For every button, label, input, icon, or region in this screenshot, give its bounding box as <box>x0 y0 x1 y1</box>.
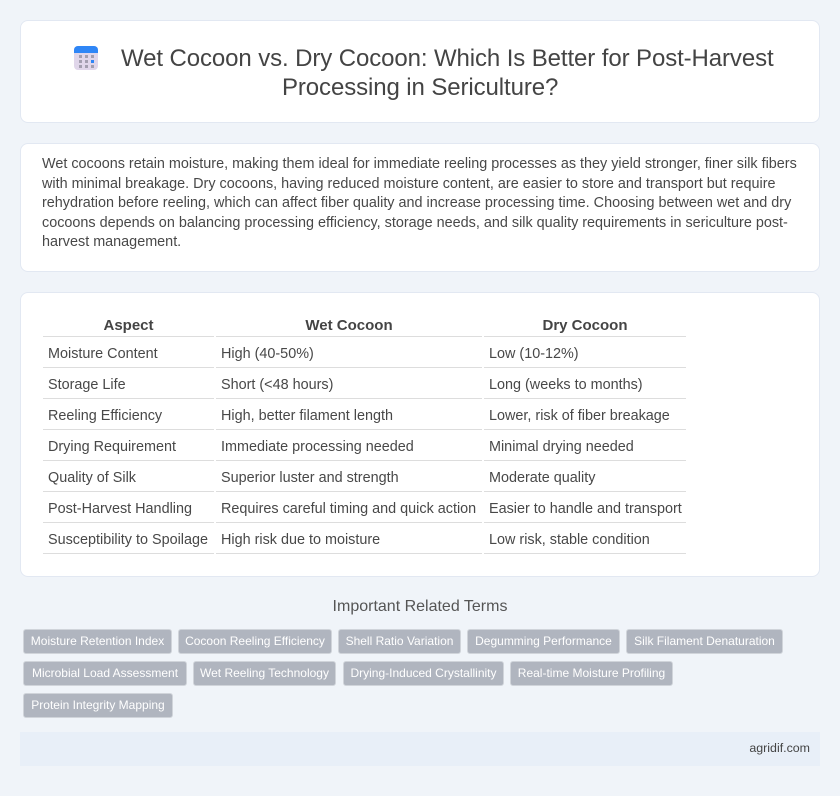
related terms tags: Moisture Retention Index <box>31 634 164 648</box>
header panel: Processing in Sericulture? <box>282 74 558 101</box>
related terms tags: Protein Integrity Mapping <box>31 698 165 712</box>
related terms tags: Microbial Load Assessment <box>32 666 178 680</box>
comparison table: Lower, risk of fiber breakage <box>489 408 670 424</box>
related terms tags: Degumming Performance <box>475 634 612 648</box>
related terms tags: Cocoon Reeling Efficiency <box>185 634 325 648</box>
comparison table: High, better filament length <box>221 408 393 424</box>
intro paragraph: Wet cocoons retain moisture, making them ideal for immediate reeling processes as they yield stronger, finer silk fibers <box>42 156 797 172</box>
comparison table: Low risk, stable condition <box>489 532 650 548</box>
heading: related terms: Important Related Terms <box>333 598 507 615</box>
comparison table: Reeling Efficiency <box>48 408 162 424</box>
comparison table: Dry Cocoon <box>542 317 628 334</box>
title <box>121 45 774 101</box>
related terms tags: Silk Filament Denaturation <box>634 634 775 648</box>
footer bar <box>20 732 820 766</box>
comparison table: Short (<48 hours) <box>221 376 333 392</box>
comparison table: Quality of Silk <box>48 470 136 486</box>
comparison table: Wet Cocoon <box>305 317 393 334</box>
related terms tags: Wet Reeling Technology <box>200 666 329 680</box>
comparison table: High (40-50%) <box>221 346 314 362</box>
footer source: agridif.com <box>749 741 810 755</box>
header panel: Wet Cocoon vs. Dry Cocoon: Which Is Better for Post-Harvest <box>121 45 774 72</box>
comparison table: Storage Life <box>48 376 126 392</box>
related terms tags: Drying-Induced Crystallinity <box>350 666 497 680</box>
intro paragraph: rehydration before reeling, which can affect fiber quality and increase processing time. Choosing between wet and dry <box>42 195 791 211</box>
intro paragraph: cocoons depends on balancing processing efficiency, storage needs, and silk quality requirements in sericulture post- <box>42 214 788 230</box>
comparison table: Superior luster and strength <box>221 470 399 486</box>
related terms tags: Real-time Moisture Profiling <box>518 666 665 680</box>
comparison table: High risk due to moisture <box>221 532 380 548</box>
related terms tags: Shell Ratio Variation <box>346 634 453 648</box>
intro paragraph <box>42 156 797 250</box>
comparison table: Moderate quality <box>489 470 595 486</box>
comparison table: Post-Harvest Handling <box>48 500 192 516</box>
related terms tags <box>23 629 783 718</box>
intro paragraph: harvest management. <box>42 234 181 250</box>
comparison table: Susceptibility to Spoilage <box>48 532 208 548</box>
comparison table: Moisture Content <box>48 346 158 362</box>
intro paragraph: with minimal breakage. Dry cocoons, having reduced moisture content, are easier to store and transport but require <box>42 176 776 192</box>
header panel <box>20 20 820 123</box>
panel: intro text <box>20 143 820 272</box>
comparison table: Requires careful timing and quick action <box>221 500 476 516</box>
comparison table: Low (10-12%) <box>489 346 579 362</box>
icon: calendar <box>74 46 98 70</box>
comparison table <box>43 317 686 554</box>
comparison table: Drying Requirement <box>48 438 176 454</box>
comparison table: Aspect <box>103 317 154 334</box>
comparison table: Long (weeks to months) <box>489 376 643 392</box>
comparison table: Easier to handle and transport <box>489 500 682 516</box>
comparison table: Immediate processing needed <box>221 438 414 454</box>
comparison table: Minimal drying needed <box>489 438 634 454</box>
panel: comparison table <box>20 292 820 577</box>
